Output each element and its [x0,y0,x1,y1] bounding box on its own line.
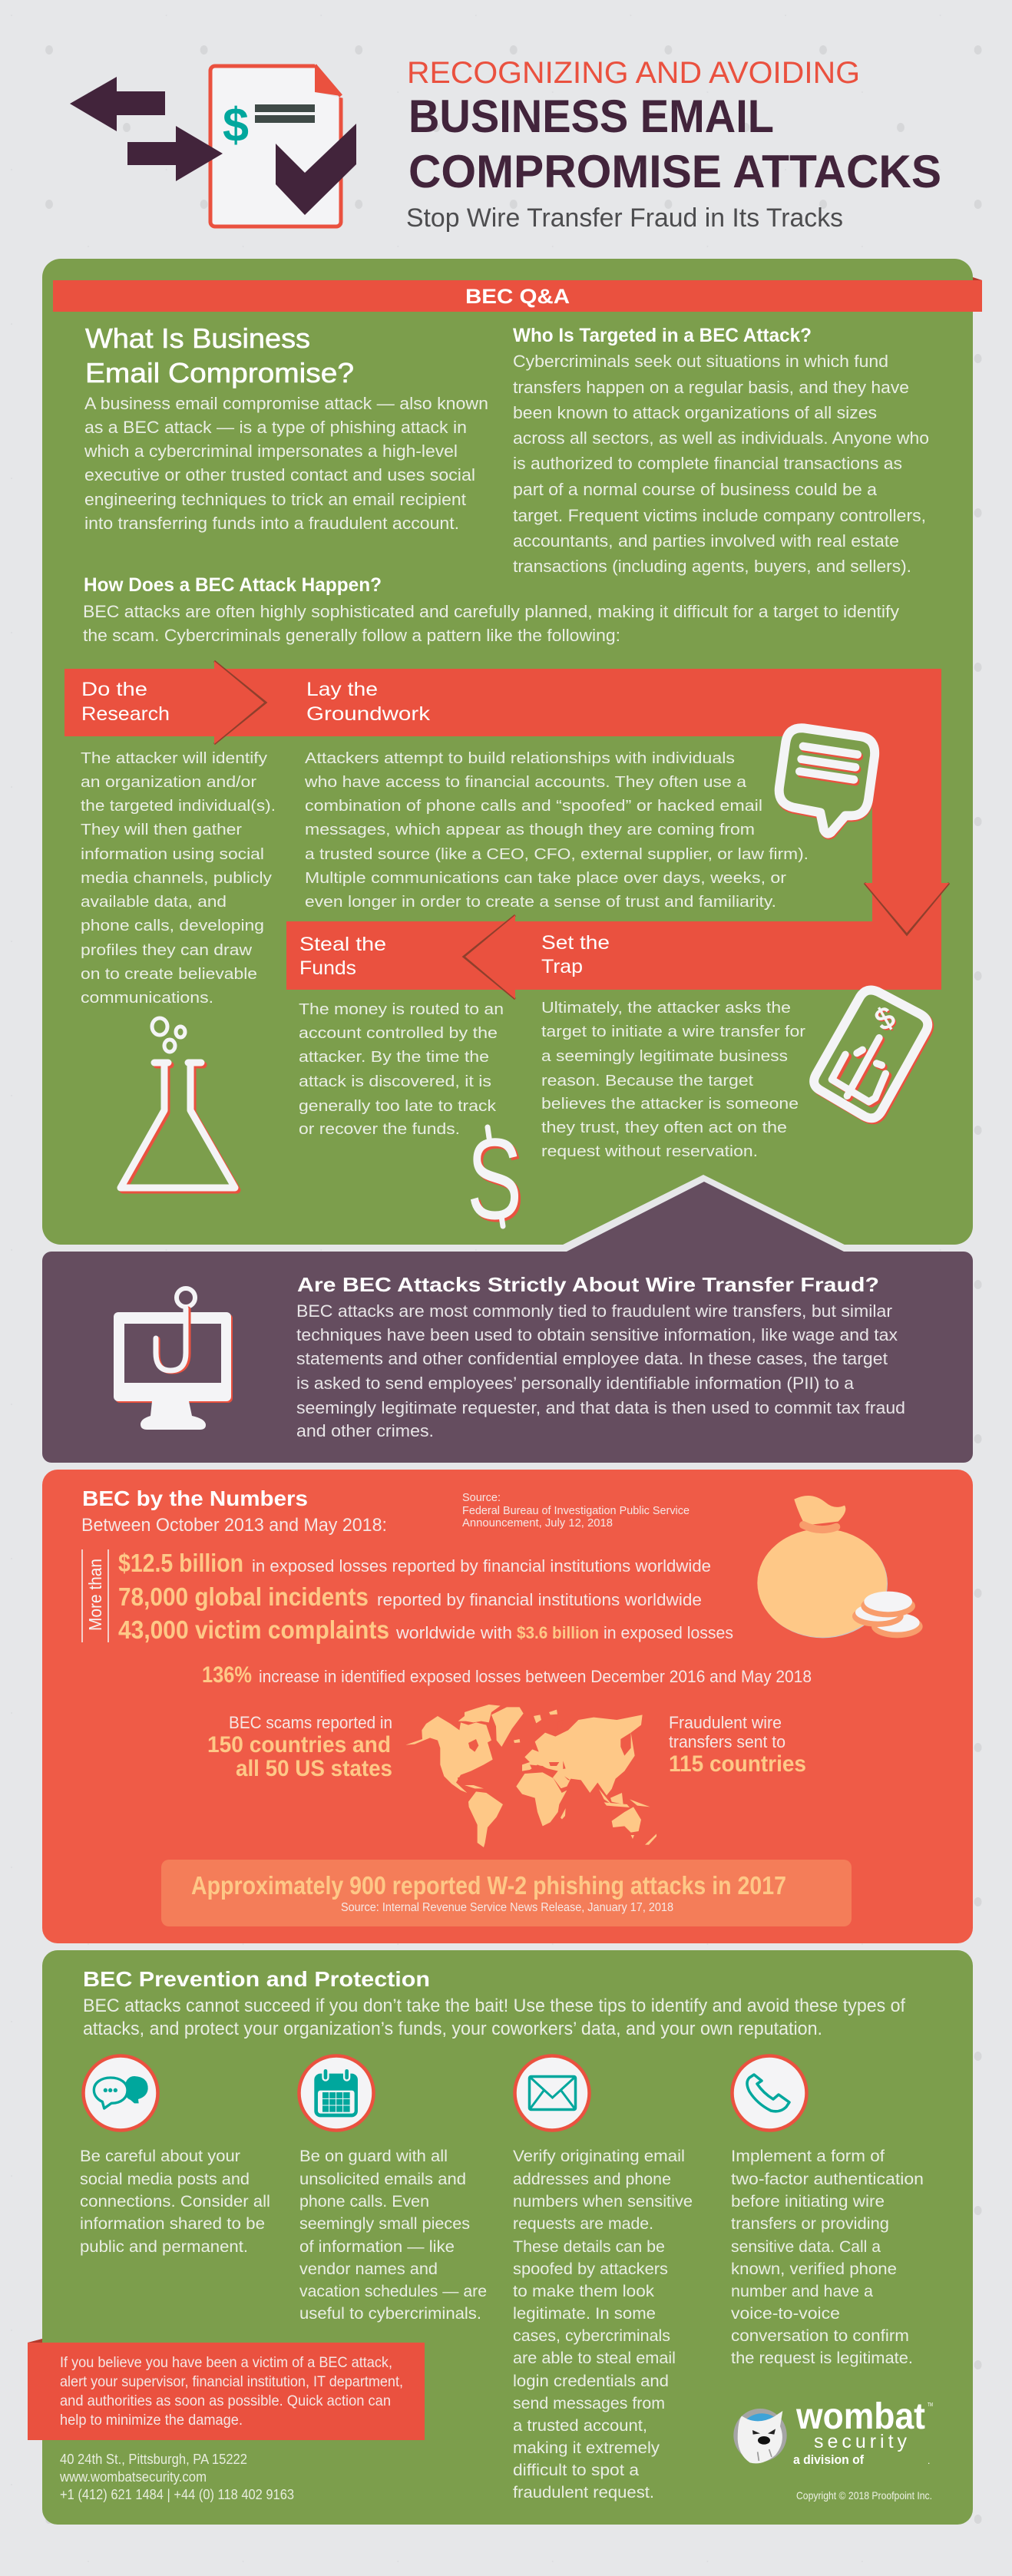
panel: strictly about wire transfer fraud [42,1252,973,1463]
stat: 136% increase [202,1662,812,1688]
text: FBI source: Announcement, July 12, 2018 [462,1516,613,1529]
text block: tip 2 unsolicited: phone calls. Even [299,2193,429,2211]
text block: how it happens intro [83,602,900,645]
text block: groundwork: Attackers attempt to build relationships with individuals [305,749,735,767]
text block: tip 2 unsolicited [299,2148,487,2323]
text block: tip 3 verify: Verify originating email [513,2148,685,2165]
text block: definition: executive or other trusted contact and uses social [84,465,475,484]
header icon: document with arrows and checkmark: $ [223,99,249,152]
panel: BEC prevention and protection [28,1950,973,2525]
text block: research: profiles they can draw [81,941,252,959]
step label: Do the Research [81,679,170,725]
text block: definition: A business email compromise attack — also known [84,394,488,413]
stat: 43,000 victim complaints: in exposed losses [604,1623,733,1642]
text block: research: media channels, publicly [81,869,273,887]
panel: BEC Q&A [42,259,982,1245]
text block: who is targeted: across all sectors, as well as individuals. Anyone who [513,428,929,448]
callout: report a BEC attack [28,2339,425,2440]
ribbon: BEC Q&A heading [53,277,982,312]
text block: other BEC uses [296,1301,905,1440]
stat: 78,000 global incidents [118,1582,702,1611]
callout: report a BEC attack: If you believe you have been a victim of a BEC attack, [60,2354,392,2371]
text block: steal the funds: The money is routed to an [299,1000,504,1018]
text block: tip 1 social media: social media posts and [80,2171,250,2188]
text block: groundwork: who have access to financial accounts. They often use a [304,773,747,791]
text block: tip 4 two-factor [731,2148,924,2367]
text: FBI source: Source: [462,1491,501,1504]
stat: 43,000 victim complaints: 43,000 victim complaints [118,1615,389,1644]
text block: prevention intro: attacks, and protect your organization’s funds, your coworkers’ data, and your own reputation. [83,2019,822,2039]
text block: tip 2 unsolicited: Be on guard with all [299,2148,448,2165]
text block: tip 2 unsolicited: unsolicited emails and [299,2171,466,2188]
text block: tip 4 two-factor: sensitive data. Call a [731,2238,881,2256]
text block: groundwork: combination of phone calls and “spoofed” or hacked email [305,797,762,815]
logo: wombat security text [793,2396,933,2467]
text block: groundwork: messages, which appear as though they are coming from [305,821,755,838]
text block: set the trap: believes the attacker is someone [541,1095,799,1113]
step label: Steal the Funds [299,934,386,979]
icon: card with dollar and hand: $ [871,1001,902,1039]
text block: other BEC uses: statements and other confidential employee data. In these cases, the target [296,1349,888,1368]
text block: tip 3 verify: to make them look [513,2283,655,2300]
logo: wombat security text: security [814,2431,908,2452]
text block: who is targeted: transactions (including agents, buyers, and sellers). [513,557,911,576]
text block: tip 3 verify: fraudulent request. [513,2484,654,2502]
text block: tip 3 verify: difficult to spot a [513,2462,639,2479]
title: COMPROMISE ATTACKS [408,146,941,197]
step label: Lay the Groundwork [306,679,431,725]
text: copyright: Copyright © 2018 Proofpoint Inc. [796,2489,932,2502]
text block: groundwork: even longer in order to create a sense of trust and familiarity. [305,893,776,911]
step label: Lay the Groundwork: Groundwork [306,703,431,725]
callout: W-2 phishing attacks [161,1860,852,1926]
heading: BEC by the Numbers: BEC by the Numbers [82,1486,308,1510]
text block: definition [84,394,488,533]
callout: report a BEC attack: alert your supervisor, financial institution, IT department, [60,2373,403,2390]
text block: tip 3 verify: requests are made. [513,2215,653,2233]
step label: Set the Trap [541,932,610,977]
text block: definition: which a cybercriminal impersonates a high-level [84,441,458,461]
text block: tip 3 verify: spoofed by attackers [513,2260,668,2278]
text block: tip 4 two-factor: Implement a form of [731,2148,885,2165]
text block: how it happens intro: the scam. Cybercriminals generally follow a pattern like the following: [83,626,620,645]
text block: tip 3 verify [513,2148,693,2502]
text block: tip 3 verify: login credentials and [513,2373,669,2390]
text block: tip 3 verify: cases, cybercriminals [513,2327,670,2345]
text block: contact address [59,2452,294,2502]
stat: 12.5 billion [118,1549,711,1577]
text block: research: an organization and/or [81,773,256,791]
stat: 115 countries: Fraudulent wire [669,1713,782,1732]
icon: money bag and coins [757,1496,923,1638]
icon: calendar [299,2056,373,2130]
logo: wombat security text: . [928,2455,930,2466]
heading: BEC Prevention and Protection: BEC Prevention and Protection [83,1967,430,1991]
text block: tip 2 unsolicited: useful to cybercriminals. [299,2305,481,2323]
text block: tip 1 social media [80,2148,270,2256]
stat: 78,000 global incidents: 78,000 global incidents [118,1582,369,1611]
text: FBI source: Federal Bureau of Investigation Public Service [462,1504,690,1517]
stat: 115 countries [669,1713,806,1777]
process ribbon arrow [64,661,949,999]
label: more than bracket: More than [85,1559,105,1631]
text block: who is targeted: is authorized to complete financial transactions as [513,454,902,473]
callout: report a BEC attack: help to minimize the damage. [60,2412,243,2429]
text block: contact address: 40 24th St., Pittsburgh, PA 15222 [60,2452,247,2467]
text block: tip 4 two-factor: voice-to-voice [731,2305,840,2323]
text block: steal the funds [299,1000,504,1138]
text block: tip 1 social media: Be careful about your [80,2148,240,2165]
heading: Who Is Targeted: Who Is Targeted in a BEC Attack? [513,325,812,346]
text block: research: They will then gather [81,821,242,838]
heading: are BEC attacks strictly about wire transfer fraud: Are BEC Attacks Strictly About Wire Transfer Fraud? [297,1273,879,1296]
text block: who is targeted: been known to attack organizations of all sizes [513,403,877,422]
text block: tip 2 unsolicited: vendor names and [299,2260,438,2278]
text block: tip 3 verify: a trusted account, [513,2417,647,2435]
text block: tip 2 unsolicited: seemingly small pieces [299,2215,470,2233]
text block: who is targeted [513,352,929,576]
stat: 150 countries: 150 countries and [207,1732,391,1758]
text block: steal the funds: attack is discovered, it is [299,1073,491,1090]
stat: 136% increase: 136% [202,1662,252,1688]
step label: Lay the Groundwork: Lay the [306,679,378,700]
text block: prevention intro: BEC attacks cannot succeed if you don’t take the bait! Use these tips to identify and avoid these types of [83,1996,905,2016]
text block: definition: engineering techniques to trick an email recipient [84,490,466,509]
heading: How Does a BEC Attack Happen: How Does a BEC Attack Happen? [84,574,382,596]
title: BUSINESS EMAIL [408,91,774,142]
callout: report a BEC attack: and authorities as soon as possible. Quick action can [60,2392,391,2409]
icon: envelope [514,2056,590,2130]
text block: who is targeted: target. Frequent victims include company controllers, [513,506,926,525]
header icon: document with arrows and checkmark [70,63,356,227]
text block: tip 4 two-factor: transfers or providing [731,2215,889,2233]
text block: tip 3 verify: addresses and phone [513,2171,671,2188]
icon: monitor with fishing hook [114,1288,233,1430]
text block: set the trap: target to initiate a wire transfer for [541,1023,805,1040]
text block: tip 1 social media: information shared to be [80,2215,265,2233]
text block: set the trap: Ultimately, the attacker asks the [541,999,791,1017]
text block: how it happens intro: BEC attacks are often highly sophisticated and carefully planned, making it difficult for a target to identify [83,602,900,621]
panel: BEC by the numbers [42,1470,973,1943]
step label: Do the Research: Research [81,703,170,725]
text block: other BEC uses: techniques have been used to obtain sensitive information, like wage and tax [296,1325,898,1344]
chart: world map [405,1705,656,1847]
text block: groundwork: a trusted source (like a CEO, CFO, external supplier, or law firm). [305,845,809,863]
text block: who is targeted: Cybercriminals seek out situations in which fund [513,352,888,371]
text block: tip 2 unsolicited: vacation schedules — are [299,2283,487,2300]
text block: other BEC uses: is asked to send employees’ personally identifiable information (PII) to a [296,1374,855,1393]
text block: who is targeted: part of a normal course of business could be a [513,480,877,499]
text block: steal the funds: account controlled by the [299,1024,498,1042]
step label: Set the Trap: Trap [541,956,583,977]
stat: 150 countries: all 50 US states [236,1756,392,1781]
logo: wombat security text: a division of [793,2453,864,2467]
text block: tip 1 social media: connections. Consider all [80,2193,270,2211]
icon: telephone [733,2056,806,2130]
text block: set the trap [541,999,805,1160]
text block: research: The attacker will identify [81,749,268,767]
text block: tip 3 verify: making it extremely [513,2439,660,2457]
icon: dollar sign: S [467,1114,522,1243]
text block: tip 4 two-factor: two-factor authentication [731,2171,924,2188]
step label: Steal the Funds: Steal the [299,934,386,955]
stat: 12.5 billion: in exposed losses reported by financial institutions worldwide [252,1556,711,1576]
text block: steal the funds: generally too late to track [299,1097,497,1115]
text block: research: on to create believable [81,965,257,983]
stat: 136% increase: increase in identified exposed losses between December 2016 and May 2018 [259,1667,812,1686]
title [406,56,941,233]
step label: Set the Trap: Set the [541,932,610,954]
stat: 150 countries [207,1713,392,1781]
text block: tip 3 verify: send messages from [513,2395,665,2412]
text block: prevention intro [83,1996,905,2039]
text block: tip 3 verify: These details can be [513,2238,665,2256]
text block: tip 4 two-factor: conversation to confirm [731,2327,909,2345]
text block: contact address: www.wombatsecurity.com [59,2469,207,2485]
text block: set the trap: a seemingly legitimate business [541,1047,788,1065]
heading: What Is Business Email Compromise: What Is Business [85,322,310,354]
text block: research: information using social [81,845,264,863]
step label: Steal the Funds: Funds [299,957,356,979]
stat: 12.5 billion: $12.5 billion [118,1549,243,1577]
icon: dollar sign: S [469,1116,524,1245]
text block: other BEC uses: BEC attacks are most commonly tied to fraudulent wire transfers, but similar [296,1301,892,1321]
stat: 43,000 victim complaints: worldwide with [395,1623,512,1642]
icon: wombat mascot [733,2409,787,2463]
heading: What Is Business Email Compromise [85,322,354,389]
icon: flask with bubbles [121,1018,237,1190]
icon: card with dollar and hand [814,990,929,1119]
callout: W-2 phishing attacks: Approximately 900 reported W-2 phishing attacks in 2017 [191,1871,786,1900]
stat: 43,000 victim complaints: $3.6 billion [517,1623,599,1642]
step label: Do the Research: Do the [81,679,147,700]
text block: set the trap: they trust, they often act on the [541,1119,787,1136]
text block: tip 4 two-factor: number and have a [731,2283,873,2300]
stat: 115 countries: transfers sent to [669,1732,785,1751]
ribbon: BEC Q&A heading: BEC Q&A [465,285,570,308]
text block: tip 4 two-factor: before initiating wire [731,2193,885,2211]
text block: tip 1 social media: public and permanent. [80,2238,248,2256]
text block: research: communications. [81,989,213,1007]
stat: 115 countries: 115 countries [669,1751,806,1777]
label: more than bracket [82,1549,108,1642]
text block: set the trap: request without reservation. [541,1143,758,1160]
icon: card with dollar and hand: $ [869,1000,901,1037]
logo: wombat security text: TM [928,2402,933,2408]
text block: definition: into transferring funds into a fraudulent account. [84,514,459,533]
text block: steal the funds: attacker. By the time the [299,1048,489,1066]
text block: tip 3 verify: legitimate. In some [513,2305,656,2323]
text block: steal the funds: or recover the funds. [299,1120,460,1138]
heading: What Is Business Email Compromise: Email Compromise? [85,357,354,389]
text block: research: available data, and [81,893,227,911]
text block: tip 4 two-factor: the request is legitimate. [731,2349,913,2367]
icon: speech bubble [779,728,875,835]
stat: 78,000 global incidents: reported by financial institutions worldwide [377,1590,702,1609]
logo: wombat security text: wombat [795,2396,925,2437]
icon: chat bubbles [83,2056,158,2130]
text block: other BEC uses: and other crimes. [296,1421,434,1440]
text block: tip 4 two-factor: known, verified phone [731,2260,897,2278]
title: Stop Wire Transfer Fraud in Its Tracks [406,203,843,233]
text block: tip 3 verify: are able to steal email [513,2349,676,2367]
text block: who is targeted: transfers happen on a regular basis, and they have [513,378,909,397]
text block: groundwork: Multiple communications can take place over days, weeks, or [305,869,786,887]
text block: tip 2 unsolicited: of information — like [299,2238,455,2256]
text block: research: the targeted individual(s). [81,797,276,815]
stat: 150 countries: BEC scams reported in [229,1713,392,1732]
text block: research: phone calls, developing [81,917,264,934]
text: FBI source [462,1491,690,1529]
stat: 43,000 victim complaints [118,1615,733,1644]
text block: definition: as a BEC attack — is a type of phishing attack in [84,418,467,437]
title: RECOGNIZING AND AVOIDING [407,56,860,90]
text block: set the trap: reason. Because the target [541,1072,753,1090]
text block: other BEC uses: seemingly legitimate requester, and that data is then used to commit tax fraud [296,1398,905,1417]
text block: groundwork [304,749,809,911]
text block: research [81,749,276,1007]
text block: contact address: +1 (412) 621 1484 | +44 (0) 118 402 9163 [60,2487,294,2502]
text: date range: Between October 2013 and May 2018: [81,1515,387,1536]
text block: tip 3 verify: numbers when sensitive [513,2193,693,2211]
arrow: up chevron from purple panel [546,1175,862,1253]
callout: W-2 phishing attacks: Source: Internal Revenue Service News Release, January 17, 2018 [341,1901,673,1914]
text block: who is targeted: accountants, and parties involved with real estate [513,531,899,551]
